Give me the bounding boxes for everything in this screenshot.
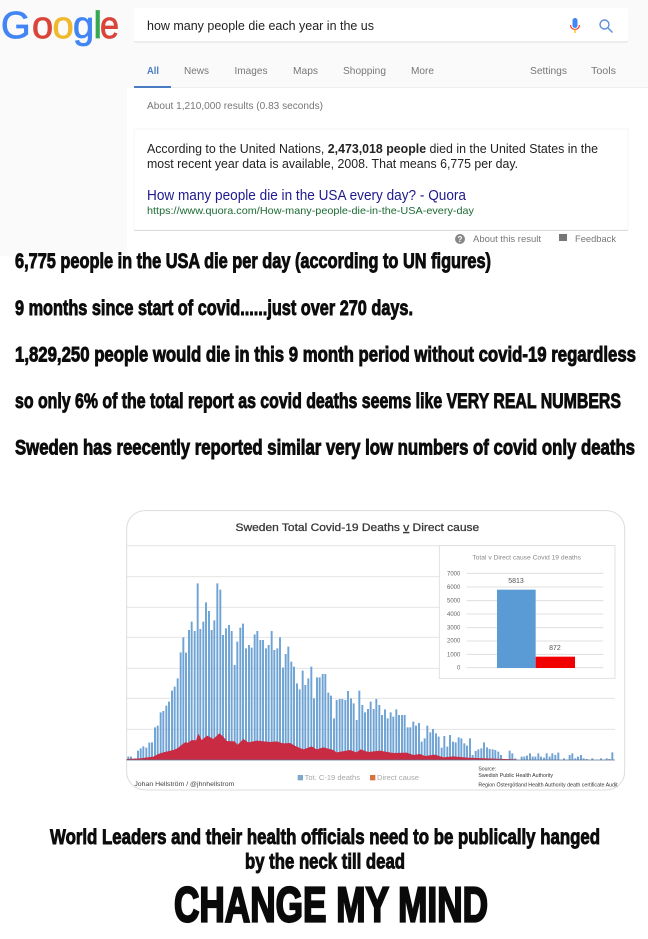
- chart source: [478, 767, 618, 789]
- google logo: [1, 5, 119, 47]
- chart source: Region Östergötland Health Authority death certificate Audit: [478, 782, 618, 789]
- bar series: total deaths: [128, 583, 612, 760]
- search tabs: All: [147, 65, 159, 77]
- answer card: https://www.quora.com/How-many-people-die-in-the-USA-every-day: [147, 205, 475, 217]
- google logo: o: [52, 5, 74, 47]
- inset panel: total vs direct bars: [439, 546, 615, 678]
- text block: claims: [15, 250, 636, 460]
- inset panel: total vs direct bars: 872: [549, 645, 561, 652]
- search tabs: [134, 65, 648, 88]
- inset panel: total vs direct bars: 5000: [447, 598, 461, 604]
- result footer links: [455, 234, 616, 245]
- answer card: How many people die in the USA every day? - Quora: [147, 188, 467, 204]
- answer card: most recent year data is available, 2008. That means 6,775 per day.: [147, 157, 518, 171]
- search tabs: Settings: [530, 65, 567, 77]
- result footer links: ?: [458, 235, 462, 244]
- inset panel: total vs direct bars: 4000: [447, 612, 461, 618]
- search tabs: More: [411, 65, 434, 77]
- text block: claims: 6,775 people in the USA die per day (according to UN figures): [15, 250, 491, 273]
- results count: About 1,210,000 results (0.83 seconds): [147, 100, 323, 112]
- chart legend: Tot. C-19 deaths: [305, 775, 361, 782]
- inset panel: total vs direct bars: Total v Direct cause Covid 19 deaths: [472, 555, 581, 561]
- chart title: Sweden Total Covid-19 Deaths v Direct cause: [235, 522, 479, 534]
- chart author credit: Johan Hellström / @jhnhellstrom: [134, 781, 235, 788]
- text block: conclusion: by the neck till dead: [245, 850, 405, 874]
- panel: google search screenshot: [0, 0, 648, 256]
- search tabs: Tools: [591, 65, 616, 77]
- inset panel: total vs direct bars: 0: [457, 666, 461, 672]
- inset panel: total vs direct bars: 1000: [447, 652, 461, 658]
- result footer links: About this result: [473, 234, 541, 245]
- chart source: Swedish Public Health Authority: [478, 773, 553, 779]
- bar series: direct cause: [127, 733, 517, 760]
- google logo: o: [32, 5, 53, 47]
- inset panel: total vs direct bars: 5813: [508, 578, 524, 585]
- icon: microphone: [570, 18, 580, 33]
- search tabs: Shopping: [343, 65, 386, 77]
- inset panel: total vs direct bars: 7000: [447, 571, 461, 577]
- text block: claims: 9 months since start of covid......just over 270 days.: [15, 297, 413, 320]
- heading: change my mind: CHANGE MY MIND: [174, 878, 488, 932]
- text block: conclusion: [50, 826, 600, 874]
- search box: how many people die each year in the us: [147, 19, 374, 33]
- icon: magnifier: [600, 20, 612, 32]
- answer card: According to the United Nations, 2,473,018 people died in the United States in the: [147, 142, 598, 156]
- search tabs: Maps: [293, 65, 318, 77]
- inset panel: total vs direct bars: 6000: [447, 585, 461, 591]
- result footer links: Feedback: [575, 234, 616, 245]
- search tabs: Images: [234, 65, 268, 77]
- search tabs: News: [184, 65, 209, 77]
- chart source: Source:: [478, 767, 496, 773]
- chart legend: [298, 775, 419, 782]
- inset panel: total vs direct bars: 3000: [447, 625, 461, 631]
- search box: [134, 8, 628, 42]
- google logo: e: [100, 5, 119, 47]
- google logo: g: [73, 5, 94, 47]
- chart legend: Direct cause: [377, 775, 419, 782]
- panel: sweden chart: [127, 511, 625, 790]
- google logo: G: [1, 5, 31, 47]
- answer card: [134, 129, 628, 231]
- inset panel: total vs direct bars: 2000: [447, 639, 461, 645]
- google logo: l: [94, 5, 102, 47]
